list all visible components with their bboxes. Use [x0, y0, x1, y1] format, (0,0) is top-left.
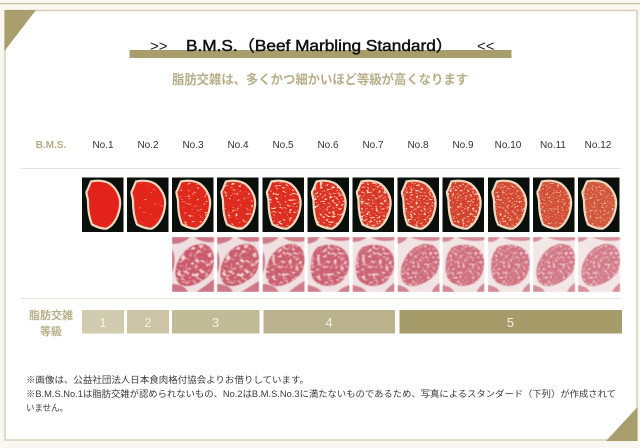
footnotes: いません。: [26, 403, 68, 413]
footnotes: [26, 374, 616, 413]
grade 3: [172, 310, 260, 334]
title: [150, 38, 495, 55]
steak diagram No.4: [217, 178, 258, 232]
photo No.6: [308, 237, 350, 292]
B.M.S. number header row: No.12: [585, 140, 612, 151]
photo No.9: [442, 237, 484, 292]
grade 5: [400, 310, 622, 334]
steak diagram No.7: [352, 178, 394, 232]
photo No.5: [262, 237, 305, 292]
row: beef cut photos: [172, 237, 620, 292]
grade 1: [82, 310, 124, 334]
title: >>: [150, 38, 168, 55]
photo No.8: [398, 237, 440, 292]
grade 5: 5: [507, 315, 514, 330]
B.M.S. number header row: B.M.S.: [36, 140, 66, 151]
corner triangle: bottom right: [606, 407, 638, 441]
steak diagram No.10: [488, 178, 530, 232]
grade 4: 4: [325, 315, 333, 330]
footnotes: ※画像は、公益社団法人日本食肉格付協会よりお借りしています。: [26, 374, 309, 385]
grade 2: [127, 310, 169, 334]
steak diagram No.8: [398, 178, 439, 232]
B.M.S. number header row: No.10: [495, 140, 522, 151]
steak diagram No.3: [172, 178, 214, 232]
B.M.S. number header row: No.11: [540, 140, 566, 151]
photo No.7: [352, 237, 394, 292]
photo No.11: [533, 237, 575, 292]
title: <<: [477, 38, 495, 55]
grade row label: 脂肪交雑: [29, 308, 73, 322]
photo No.12: [578, 237, 620, 292]
grade row label: [29, 308, 73, 338]
steak diagram No.1: [82, 178, 124, 232]
B.M.S. number header row: No.4: [227, 140, 249, 151]
steak diagram No.6: [308, 178, 349, 232]
grade row label: 等級: [40, 324, 62, 338]
photo No.4: [217, 237, 259, 292]
steak diagram No.2: [127, 178, 168, 232]
corner triangle: top left: [4, 10, 36, 51]
title: B.M.S.（Beef Marbling Standard）: [186, 38, 453, 55]
footnotes: ※B.M.S.No.1は脂肪交雑が認められないもの、No.2はB.M.S.No.3に満たないものであるため、写真によるスタンダード（下列）が作成されて: [26, 388, 616, 399]
grade bars: [82, 310, 622, 334]
steak diagram No.5: [262, 178, 304, 232]
grade 4: [264, 310, 395, 334]
B.M.S. number header row: No.8: [407, 140, 429, 151]
top border line: [0, 3, 640, 4]
B.M.S. number header row: No.7: [362, 140, 384, 151]
B.M.S. number header row: No.1: [92, 140, 114, 151]
title bar: [130, 50, 512, 58]
grade 3: 3: [212, 315, 219, 330]
steak diagram No.9: [442, 178, 484, 232]
steak diagram No.11: [533, 178, 574, 232]
subtitle: 脂肪交雑は、多くかつ細かいほど等級が高くなります: [172, 72, 468, 87]
photo No.10: [488, 237, 530, 292]
row: marbling standard diagrams: [82, 178, 620, 232]
B.M.S. number header row: No.9: [452, 140, 474, 151]
B.M.S. number header row: [36, 140, 612, 151]
B.M.S. number header row: No.5: [272, 140, 294, 151]
B.M.S. number header row: No.3: [182, 140, 204, 151]
B.M.S. number header row: No.6: [317, 140, 339, 151]
steak diagram No.12: [578, 178, 620, 232]
B.M.S. number header row: No.2: [137, 140, 159, 151]
grade 1: 1: [99, 315, 107, 330]
grade 2: 2: [144, 315, 152, 330]
photo No.3: [172, 237, 214, 292]
